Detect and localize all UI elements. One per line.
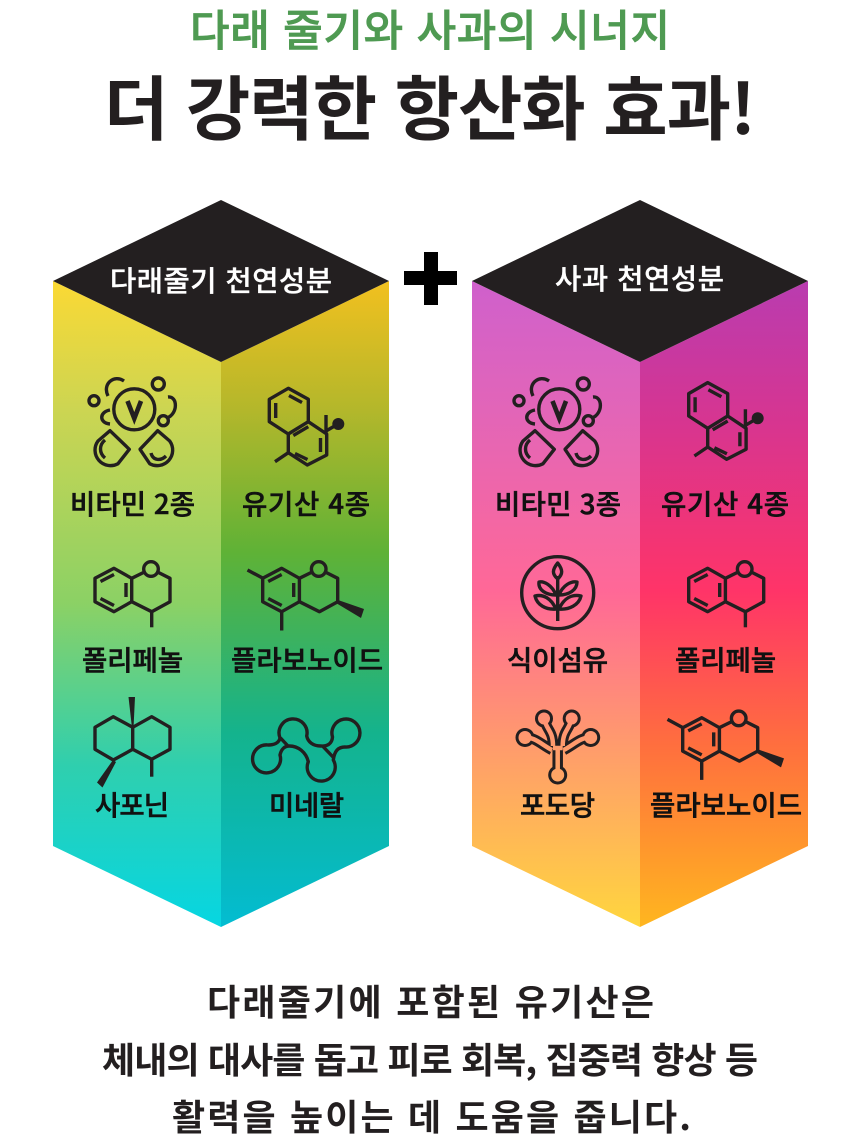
icon: glucose [516, 710, 600, 784]
panel right face [640, 281, 808, 927]
icon: plus sign [404, 252, 457, 305]
panel heading: 다래줄기 천연성분 [110, 259, 332, 300]
label: dietary fibre: 식이섬유 [507, 638, 608, 678]
panel heading: 사과 천연성분 [555, 257, 724, 298]
label: polyphenol: 폴리페놀 [675, 638, 776, 678]
label: vitamin 2: 비타민 2종 [70, 482, 195, 522]
icon: polyphenol [689, 562, 764, 627]
panel: kiwi stem natural ingredients [53, 200, 389, 927]
icon: flavonoid [248, 562, 364, 630]
panel: apple natural ingredients [472, 200, 808, 927]
label: mineral: 미네랄 [269, 783, 344, 823]
panel left face [472, 281, 640, 927]
icon: polyphenol [95, 562, 170, 627]
label: flavonoid: 플라보노이드 [231, 638, 383, 678]
description line 1: 다래줄기에 포함된 유기산은 [207, 974, 654, 1026]
title: main heading: 더 강력한 항산화 효과! [104, 54, 756, 155]
description line 3: 활력을 높이는 데 도움을 줍니다. [172, 1089, 691, 1141]
panel left face [53, 281, 221, 927]
label: organic acid 4: 유기산 4종 [661, 482, 789, 522]
icon: saponin [95, 697, 170, 788]
label: flavonoid: 플라보노이드 [650, 783, 802, 823]
icon: vitamin [514, 378, 600, 466]
panel top cap [53, 200, 389, 362]
panel right face [221, 281, 389, 927]
text block: description [102, 974, 758, 1141]
label: polyphenol: 폴리페놀 [82, 638, 183, 678]
icon: flavonoid [668, 711, 784, 780]
label: organic acid 4: 유기산 4종 [242, 482, 370, 522]
label: vitamin 3: 비타민 3종 [495, 482, 621, 522]
label: glucose: 포도당 [520, 783, 595, 823]
panel top cap [472, 200, 808, 362]
label: saponin: 사포닌 [95, 783, 169, 823]
icon: organic acid [269, 388, 344, 465]
icon: organic acid [689, 383, 764, 459]
icon: mineral [253, 719, 360, 781]
description line 2: 체내의 대사를 돕고 피로 회복, 집중력 향상 등 [102, 1032, 758, 1084]
icon: vitamin [89, 378, 175, 466]
icon: dietary fibre [522, 557, 594, 629]
